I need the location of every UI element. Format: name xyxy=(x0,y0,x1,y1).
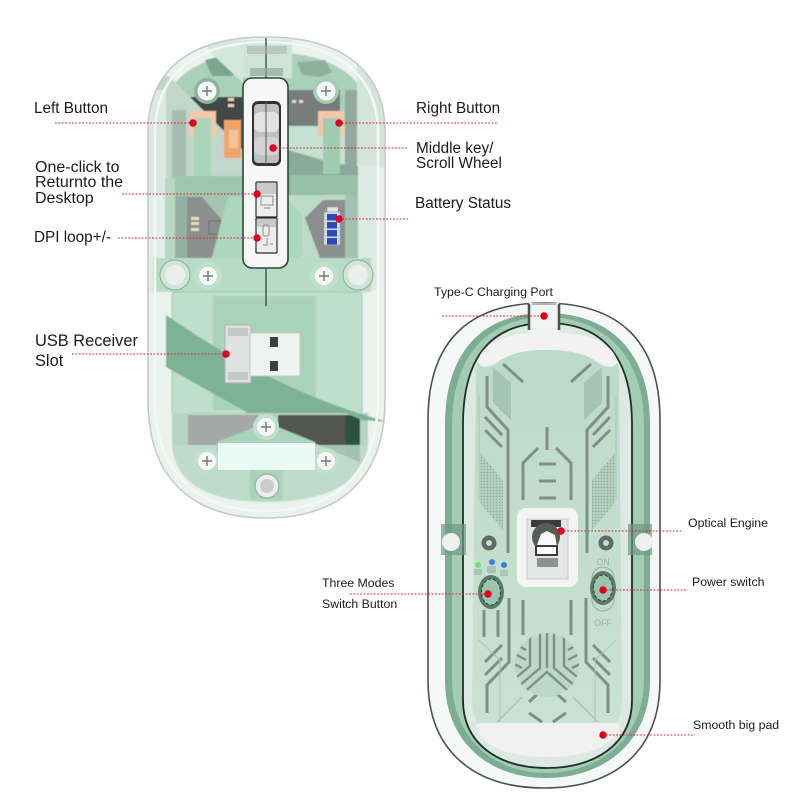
callout: Right Button: Right Button xyxy=(416,100,500,117)
callout: Battery Status xyxy=(335,195,511,223)
three modes switch xyxy=(478,575,504,609)
washers and clip xyxy=(160,260,373,498)
left shard xyxy=(208,40,243,83)
callout: Right Button xyxy=(335,100,500,127)
pale left overlay xyxy=(157,75,242,178)
callout: Middle key / Scroll Wheel: Middle key/ xyxy=(416,140,494,157)
outer shell xyxy=(428,303,660,788)
button strip xyxy=(243,78,288,268)
screws xyxy=(194,78,339,474)
ON label: ON xyxy=(596,557,610,567)
round hatch vent xyxy=(515,633,579,697)
callout: Left Button: Left Button xyxy=(34,100,108,117)
center seam and connector xyxy=(247,38,287,306)
OFF label: OFF xyxy=(594,618,612,628)
optical sensor xyxy=(517,508,578,587)
callout: DPI loop: DPI loop+/- xyxy=(34,229,111,246)
right PCB xyxy=(288,90,340,126)
green cross bars xyxy=(172,176,243,196)
inner panel xyxy=(472,350,622,724)
upper chassis xyxy=(176,53,358,164)
callout: One-click to Return to the Desktop: Desktop xyxy=(35,190,94,207)
callout: Left Button xyxy=(34,100,197,127)
levers and switches xyxy=(190,111,216,137)
callout: Middle key / Scroll Wheel xyxy=(269,140,502,172)
callout: One-click to Return to the Desktop xyxy=(35,159,261,207)
right shard and dark portion xyxy=(288,126,345,165)
callout: USB Receiver Slot xyxy=(35,332,230,370)
lower left / right fields xyxy=(148,196,173,292)
white top band xyxy=(478,332,617,367)
dark PCB xyxy=(190,97,243,152)
lower bowl xyxy=(172,412,368,502)
callout: Optical Engine xyxy=(557,516,768,535)
callout: Battery Status: Battery Status xyxy=(415,195,511,212)
plate backing xyxy=(217,427,315,500)
circuit graphics xyxy=(479,364,616,722)
callout: Middle key / Scroll Wheel: Scroll Wheel xyxy=(416,155,502,172)
dark diagonal band xyxy=(166,315,388,422)
mode LEDs xyxy=(474,559,508,576)
screw posts xyxy=(482,536,614,550)
smooth pad xyxy=(476,723,619,757)
callout: DPI loop xyxy=(34,229,261,246)
callout: Three Modes Switch Button xyxy=(322,576,492,611)
callout: USB Receiver Slot: Slot xyxy=(35,352,64,370)
power switch xyxy=(590,567,616,611)
callout: One-click to Return to the Desktop: Returnto the xyxy=(35,174,123,191)
callout: Smooth big pad xyxy=(599,718,779,739)
green ring xyxy=(445,313,650,778)
callout: One-click to Return to the Desktop: One-click to xyxy=(35,159,120,176)
Type-C port xyxy=(529,303,559,333)
callout: Type-C Charging Port xyxy=(434,285,554,320)
top-view transparent mouse xyxy=(140,30,390,525)
screw row band xyxy=(153,258,371,292)
scroll wheel xyxy=(252,101,281,166)
callout: Type-C Charging Port: Type-C Charging Port xyxy=(434,285,554,299)
callout: Three Modes Switch Button: Switch Button xyxy=(322,597,397,611)
white label plate xyxy=(218,443,315,470)
receiver panel xyxy=(172,292,362,414)
callout: Optical Engine: Optical Engine xyxy=(688,516,768,530)
callout: Power switch: Power switch xyxy=(692,575,765,589)
callout: Three Modes Switch Button: Three Modes xyxy=(322,576,394,590)
battery indicator xyxy=(324,207,340,245)
callout: Power switch xyxy=(599,575,765,594)
callout: USB Receiver Slot: USB Receiver xyxy=(35,332,138,350)
callout: Smooth big pad: Smooth big pad xyxy=(693,718,779,732)
desktop button xyxy=(256,182,277,217)
DPI button xyxy=(256,218,277,253)
bottom-view mouse xyxy=(428,303,660,788)
side clips xyxy=(441,524,653,555)
USB receiver xyxy=(225,325,300,383)
